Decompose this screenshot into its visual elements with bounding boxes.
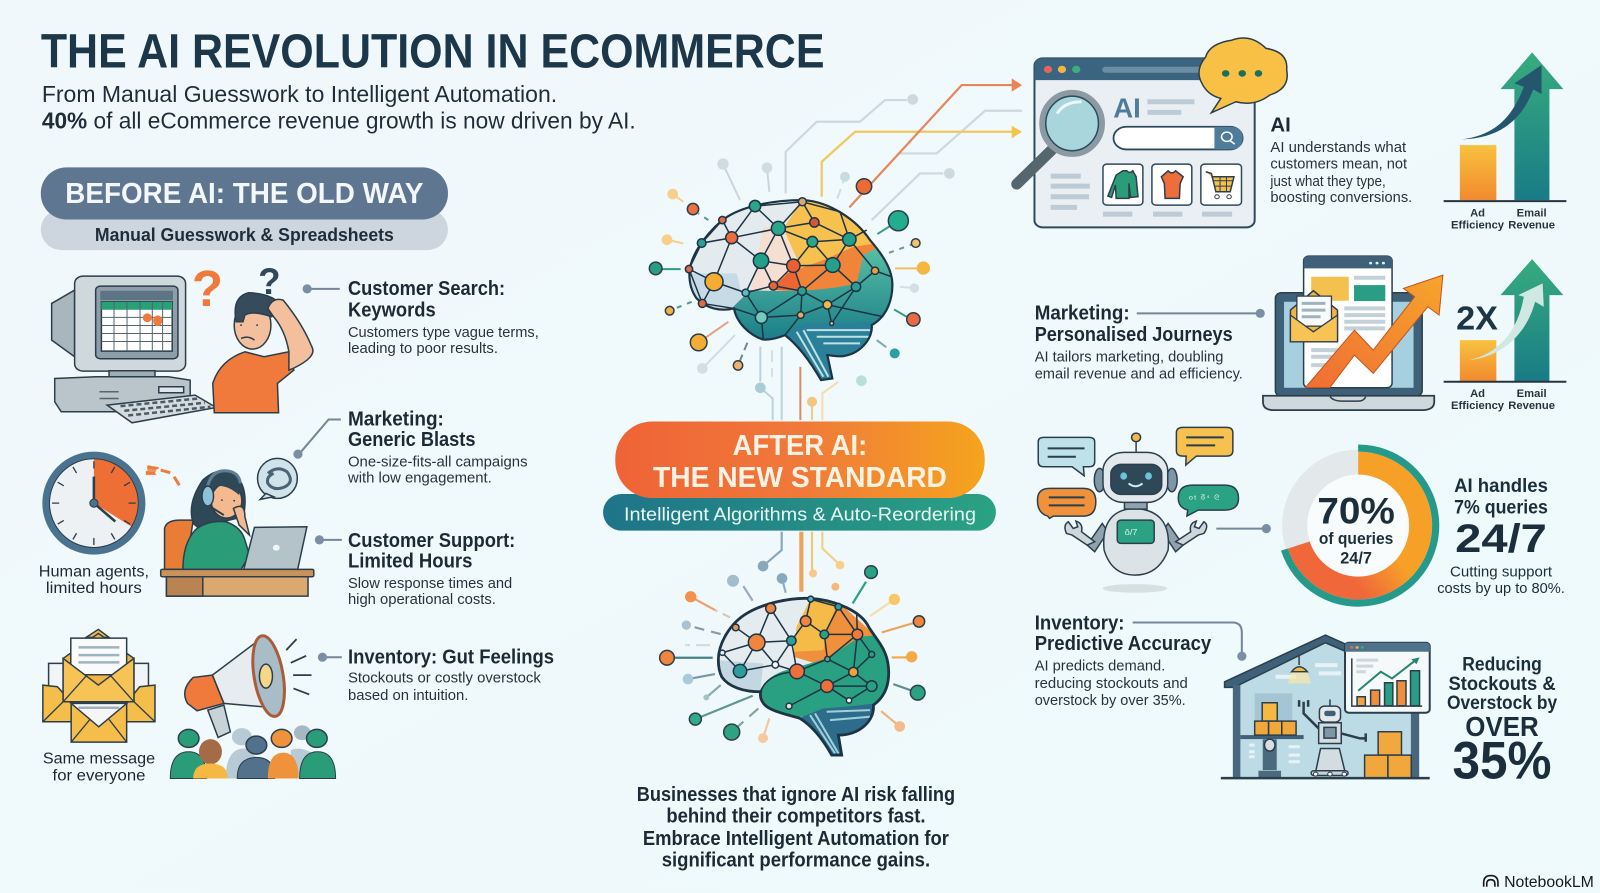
heading: before AI banner	[41, 167, 448, 250]
caption: same message	[43, 750, 155, 785]
icon: question marks	[192, 260, 281, 317]
text: AI search: AI understands what	[1270, 140, 1406, 156]
icon: support robot with chat bubbles: ot ᘔ⁴ ᘓ	[1189, 494, 1221, 501]
text: AI handles queries	[1437, 475, 1565, 597]
text: predictive accuracy	[1035, 613, 1246, 709]
text: personalised journeys: Personalised Journeys	[1035, 324, 1233, 346]
caption: human agents: Human agents,	[39, 564, 149, 581]
callout: marketing: One-size-fits-all campaigns	[348, 454, 528, 470]
callout: inventory: Inventory: Gut Feelings	[348, 646, 554, 668]
icon: support robot with chat bubbles: ô/7	[1125, 528, 1138, 537]
panel: after AI	[1017, 38, 1566, 791]
closing message: behind their competitors fast.	[666, 806, 926, 828]
callout: marketing	[293, 409, 528, 487]
heading: before AI banner: BEFORE AI: THE OLD WAY	[65, 178, 423, 210]
callout: customer support	[315, 530, 515, 608]
text: AI handles queries: Cutting support	[1450, 565, 1552, 581]
number: 2X: 2X	[1456, 301, 1499, 338]
chart: ad efficiency vs email revenue 2x: Revenue	[1508, 400, 1555, 412]
callout: customer support: Slow response times and	[348, 576, 512, 592]
icon: lower brain	[660, 532, 925, 758]
closing message: Businesses that ignore AI risk falling	[637, 784, 955, 806]
text: reducing stockouts: Overstock by	[1447, 692, 1557, 714]
text: AI search: AI	[1270, 115, 1291, 137]
text: personalised journeys: email revenue and ad efficiency.	[1035, 367, 1243, 383]
chart: 70% donut: 24/7	[1340, 549, 1372, 567]
text: personalised journeys	[1035, 302, 1265, 383]
callout: inventory: Stockouts or costly overstock	[348, 671, 541, 687]
subtitle: From Manual Guesswork to Intelligent Automation.	[42, 81, 557, 107]
caption: same message: for everyone	[53, 768, 146, 785]
caption: human agents: limited hours	[46, 580, 142, 597]
closing message: Embrace Intelligent Automation for	[643, 828, 949, 850]
icon: question marks: ?	[258, 261, 281, 302]
text: AI search: boosting conversions.	[1270, 190, 1412, 206]
heading: after AI banner: Intelligent Algorithms & Auto-Reordering	[624, 503, 976, 524]
callout: customer support: Customer Support:	[348, 530, 515, 552]
heading: after AI banner: AFTER AI:	[733, 430, 867, 462]
connector lines to the right panel	[786, 78, 1022, 220]
icon: old computer with spreadsheet	[52, 276, 313, 423]
chart: ad efficiency vs email revenue 1: Revenue	[1508, 220, 1555, 232]
chart: ad efficiency vs email revenue 2x: Ad	[1470, 388, 1485, 400]
icon: support robot with chat bubbles	[1037, 427, 1238, 593]
text: AI search: customers mean, not	[1270, 156, 1407, 172]
chart: ad efficiency vs email revenue 1	[1444, 52, 1566, 232]
icon: support agent at desk	[147, 458, 314, 596]
chart: ad efficiency vs email revenue 2x: Efficiency	[1451, 400, 1505, 412]
chart: 70% donut: of queries	[1319, 530, 1393, 548]
chart: ad efficiency vs email revenue 1: Efficiency	[1451, 220, 1505, 232]
text: predictive accuracy: Predictive Accuracy	[1035, 633, 1212, 655]
text: predictive accuracy: Inventory:	[1035, 613, 1124, 635]
chart: ad efficiency vs email revenue 1: Email	[1517, 207, 1547, 219]
label: AI in search window: AI	[1113, 92, 1141, 123]
callout: marketing: with low engagement.	[347, 471, 492, 487]
icon: envelopes	[43, 629, 155, 742]
text: AI handles queries: 24/7	[1455, 517, 1547, 561]
text: reducing stockouts: 35%	[1453, 732, 1552, 791]
callout: marketing: Generic Blasts	[348, 429, 476, 451]
logo: NotebookLM: NotebookLM	[1504, 874, 1594, 891]
caption: human agents	[39, 564, 149, 597]
text: reducing stockouts: Stockouts &	[1448, 673, 1556, 695]
chart: 70% donut: 70%	[1317, 491, 1395, 532]
subtitle	[42, 81, 636, 134]
text: predictive accuracy: overstock by over 35%.	[1035, 693, 1186, 709]
callout: customer search: leading to poor results.	[348, 341, 498, 357]
callout: customer search	[303, 278, 539, 357]
title: THE AI REVOLUTION IN ECOMMERCE	[41, 25, 824, 78]
closing message	[637, 784, 955, 871]
callout: customer search: Customer Search:	[348, 278, 505, 300]
panel: centre	[603, 78, 1022, 871]
text: reducing stockouts: Reducing	[1462, 653, 1542, 675]
subtitle: 40% of all eCommerce revenue growth is now driven by AI.	[42, 108, 636, 134]
chart: ad efficiency vs email revenue 2x	[1444, 259, 1566, 412]
caption: same message: Same message	[43, 750, 155, 767]
text: reducing stockouts: OVER	[1465, 711, 1539, 742]
heading: before AI banner: Manual Guesswork & Spreadsheets	[95, 224, 394, 245]
icon: laptop with growth arrow	[1263, 256, 1443, 410]
callout: marketing: Marketing:	[348, 409, 444, 431]
chart: ad efficiency vs email revenue 2x: Email	[1517, 388, 1547, 400]
callout: customer support: high operational costs.	[348, 592, 496, 608]
icon: question marks: ?	[192, 260, 223, 317]
callout: customer search: Customers type vague terms,	[348, 325, 539, 341]
closing message: significant performance gains.	[662, 849, 930, 871]
text: predictive accuracy: reducing stockouts and	[1035, 676, 1188, 692]
icon: upper brain	[649, 158, 930, 420]
text: personalised journeys: AI tailors marketing, doubling	[1035, 349, 1223, 365]
text: reducing stockouts	[1447, 653, 1557, 791]
chart: 70% donut	[1284, 448, 1436, 603]
text: personalised journeys: Marketing:	[1035, 302, 1130, 324]
connector: robot to donut	[1216, 524, 1271, 533]
heading: after AI banner	[603, 422, 996, 531]
text: AI search	[1269, 115, 1412, 206]
chart: ad efficiency vs email revenue 1: Ad	[1470, 207, 1485, 219]
text: AI search: just what they type,	[1269, 174, 1386, 190]
text: AI handles queries: 7% queries	[1454, 496, 1548, 518]
heading: after AI banner: THE NEW STANDARD	[653, 462, 947, 494]
text: AI handles queries: AI handles	[1454, 475, 1548, 497]
icon: clock	[46, 455, 142, 551]
icon: AI search window	[1017, 38, 1287, 227]
callout: customer search: Keywords	[348, 299, 436, 321]
icon: megaphone and audience	[170, 634, 336, 778]
callout: customer support: Limited Hours	[348, 550, 472, 572]
callout: inventory: based on intuition.	[348, 688, 468, 704]
icon: warehouse with robot	[1221, 635, 1430, 778]
callout: inventory	[318, 646, 554, 704]
panel: before AI	[39, 167, 554, 785]
text: predictive accuracy: AI predicts demand.	[1035, 658, 1165, 674]
text: AI handles queries: costs by up to 80%.	[1437, 581, 1565, 597]
